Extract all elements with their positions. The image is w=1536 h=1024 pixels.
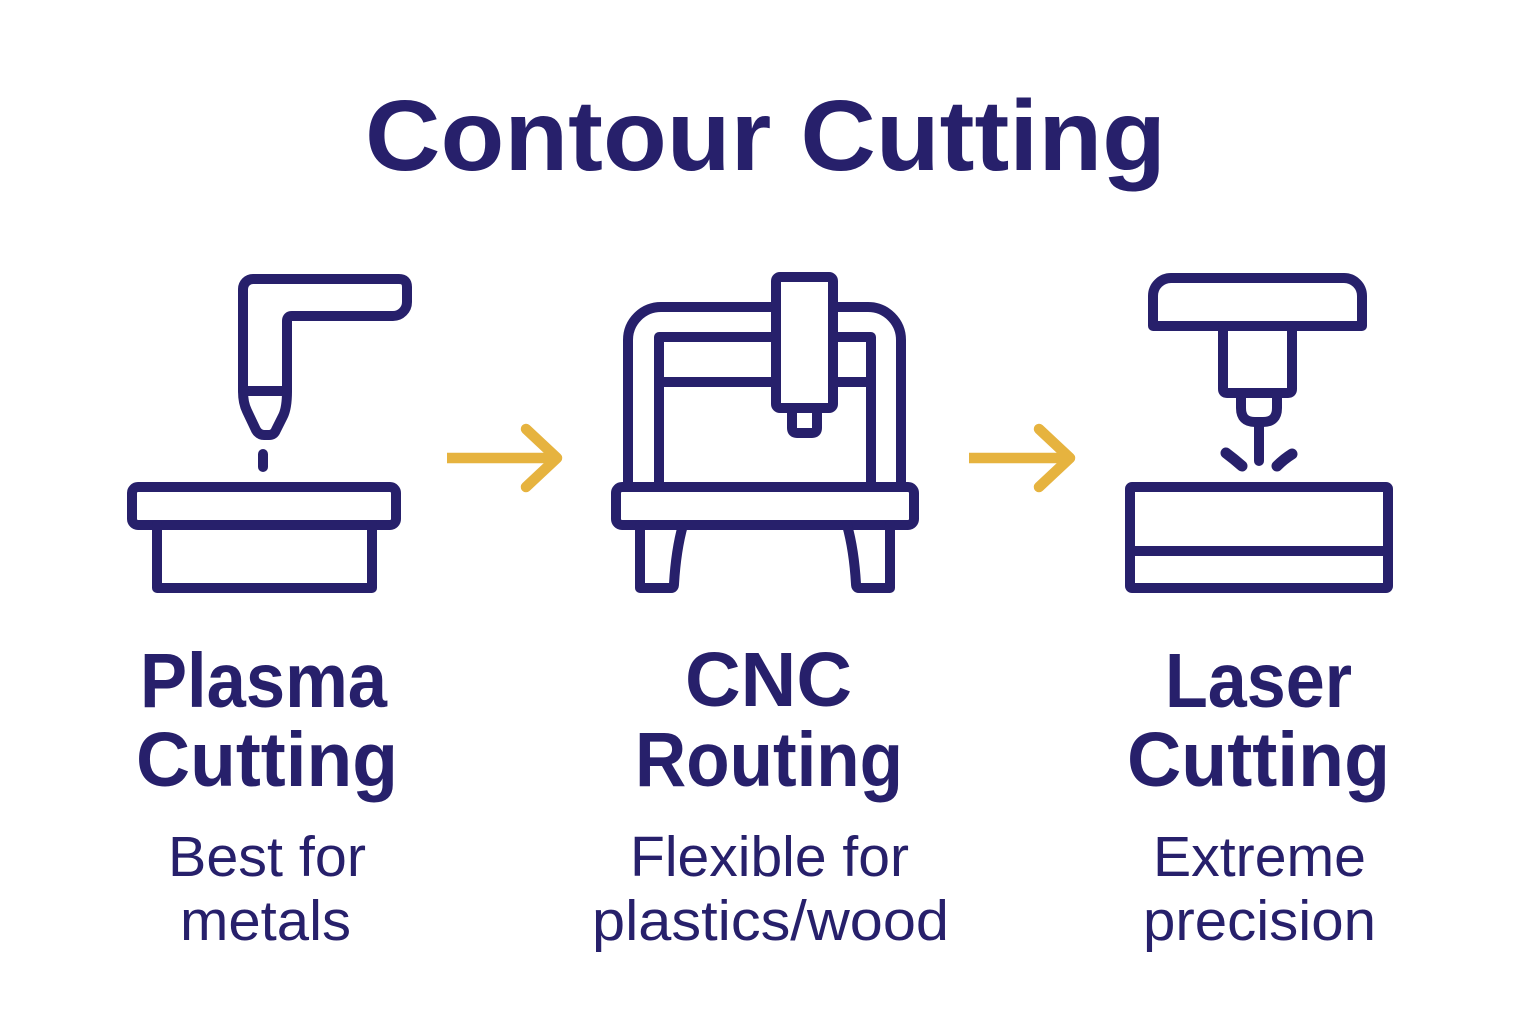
heading: plasma cutting (136, 638, 398, 803)
description: plasma cutting: Best for (168, 825, 366, 889)
column text: CNC routing (592, 637, 949, 953)
description: laser cutting: precision (1143, 889, 1376, 953)
column text: laser cutting (1127, 638, 1390, 953)
description: CNC routing: plastics/wood (592, 889, 949, 953)
arrow: CNC to laser (969, 429, 1070, 487)
heading: CNC routing: Routing (635, 717, 903, 803)
description: laser cutting (1143, 825, 1376, 953)
description: CNC routing: Flexible for (630, 825, 909, 889)
description: laser cutting: Extreme (1153, 825, 1366, 889)
arrow: plasma to CNC (447, 429, 557, 487)
heading: laser cutting (1127, 638, 1390, 803)
description: CNC routing (592, 825, 949, 953)
title: Contour Cutting (365, 80, 1166, 192)
heading: CNC routing: CNC (685, 637, 852, 723)
heading: plasma cutting: Cutting (136, 717, 398, 803)
icon: plasma cutter (132, 279, 407, 588)
icon: laser cutter (1130, 278, 1388, 588)
column text: plasma cutting (136, 638, 398, 953)
icon: CNC router (616, 277, 914, 588)
heading: plasma cutting: Plasma (140, 638, 388, 724)
heading: laser cutting: Laser (1165, 638, 1352, 724)
heading: CNC routing (635, 637, 903, 803)
description: plasma cutting: metals (180, 889, 351, 953)
description: plasma cutting (168, 825, 366, 953)
heading: laser cutting: Cutting (1127, 717, 1390, 803)
